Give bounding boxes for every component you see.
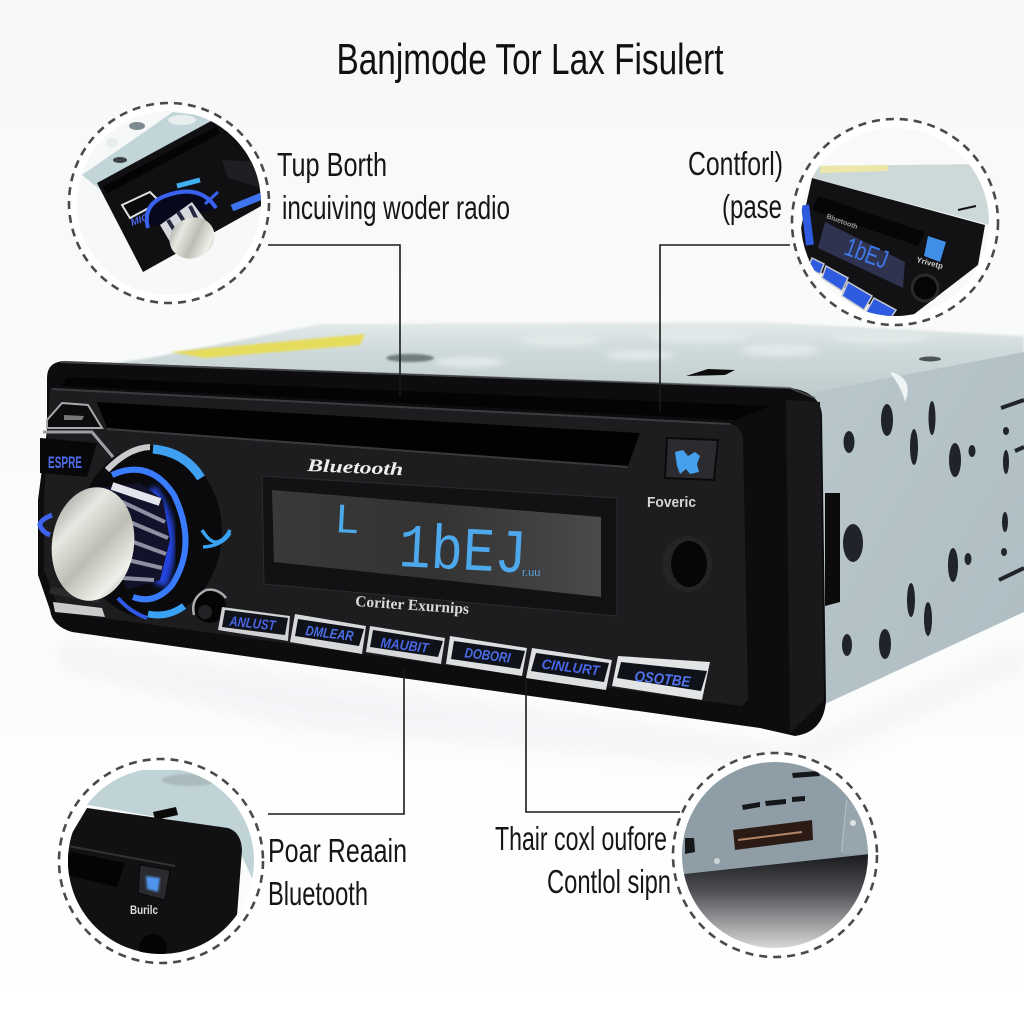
top surface of chassis <box>100 322 1024 402</box>
round jack <box>662 536 712 592</box>
preset 5: CINLURT <box>541 656 602 679</box>
callout text: top left: Tup Borth <box>277 146 387 183</box>
title: Banjmode Tor Lax Fisulert <box>336 35 724 84</box>
LCD display: r.uu <box>522 567 540 579</box>
front bezel <box>38 361 826 736</box>
callout: bottom right <box>673 753 880 960</box>
preset buttons <box>218 607 710 700</box>
preset 2 <box>290 614 366 654</box>
callout: bottom left <box>59 759 265 965</box>
callout text: top left: incuiving woder radio <box>282 189 510 226</box>
small round button <box>193 590 226 623</box>
callout: top right: Bluetooth <box>825 213 858 231</box>
preset 3: MAUBIT <box>380 634 431 656</box>
preset 6: OSOTBE <box>634 668 692 691</box>
callout text: top right <box>688 145 783 225</box>
floor reflection <box>60 640 1024 770</box>
callout text: bottom right: Contlol sipn <box>547 863 671 900</box>
callout text: bottom left: Poar Reaain <box>268 832 407 869</box>
callout text: bottom left: Bluetooth <box>268 875 368 912</box>
left control cluster <box>40 403 113 617</box>
preset 4: DOBORI <box>464 644 512 666</box>
LCD display <box>262 476 617 616</box>
button caption: Foveric <box>647 494 696 511</box>
callout: bottom left: Burilc <box>130 903 158 917</box>
preset 5 <box>526 648 612 690</box>
preset 1: ANLUST <box>228 613 277 634</box>
callout text: top right: Contforl) <box>688 145 783 182</box>
callout text: top left <box>277 146 510 226</box>
LCD display: L <box>333 497 361 546</box>
callout: top right: Yrivetp <box>915 255 944 271</box>
preset 1 <box>218 607 290 641</box>
car radio illustration <box>38 322 1024 736</box>
preset 4 <box>446 636 527 676</box>
connector lines <box>268 245 790 814</box>
callout text: bottom left <box>268 832 407 912</box>
callout: top left: MIO! <box>129 211 155 229</box>
bluetooth button <box>665 438 718 480</box>
callout text: top right: (pase <box>722 188 782 225</box>
preset 3 <box>366 626 445 664</box>
preset 2: DMLEAR <box>305 622 355 644</box>
LCD display: 1bEJ <box>397 514 529 592</box>
callout text: bottom right <box>495 820 671 900</box>
brand label: Bluetooth <box>306 455 404 479</box>
callout: top left <box>68 102 270 304</box>
callout text: bottom right: Thair coxl oufore <box>495 820 667 857</box>
side panel <box>815 352 1024 704</box>
left control cluster: ESPRE <box>48 453 82 472</box>
disc slot <box>97 402 640 466</box>
callout: top right: 1bEJ <box>841 231 893 275</box>
volume knob with blue ring <box>44 446 230 618</box>
sublabel under display: Coriter Exurnips <box>355 593 470 618</box>
preset 6 <box>612 656 710 700</box>
callout: top right <box>790 119 1000 330</box>
